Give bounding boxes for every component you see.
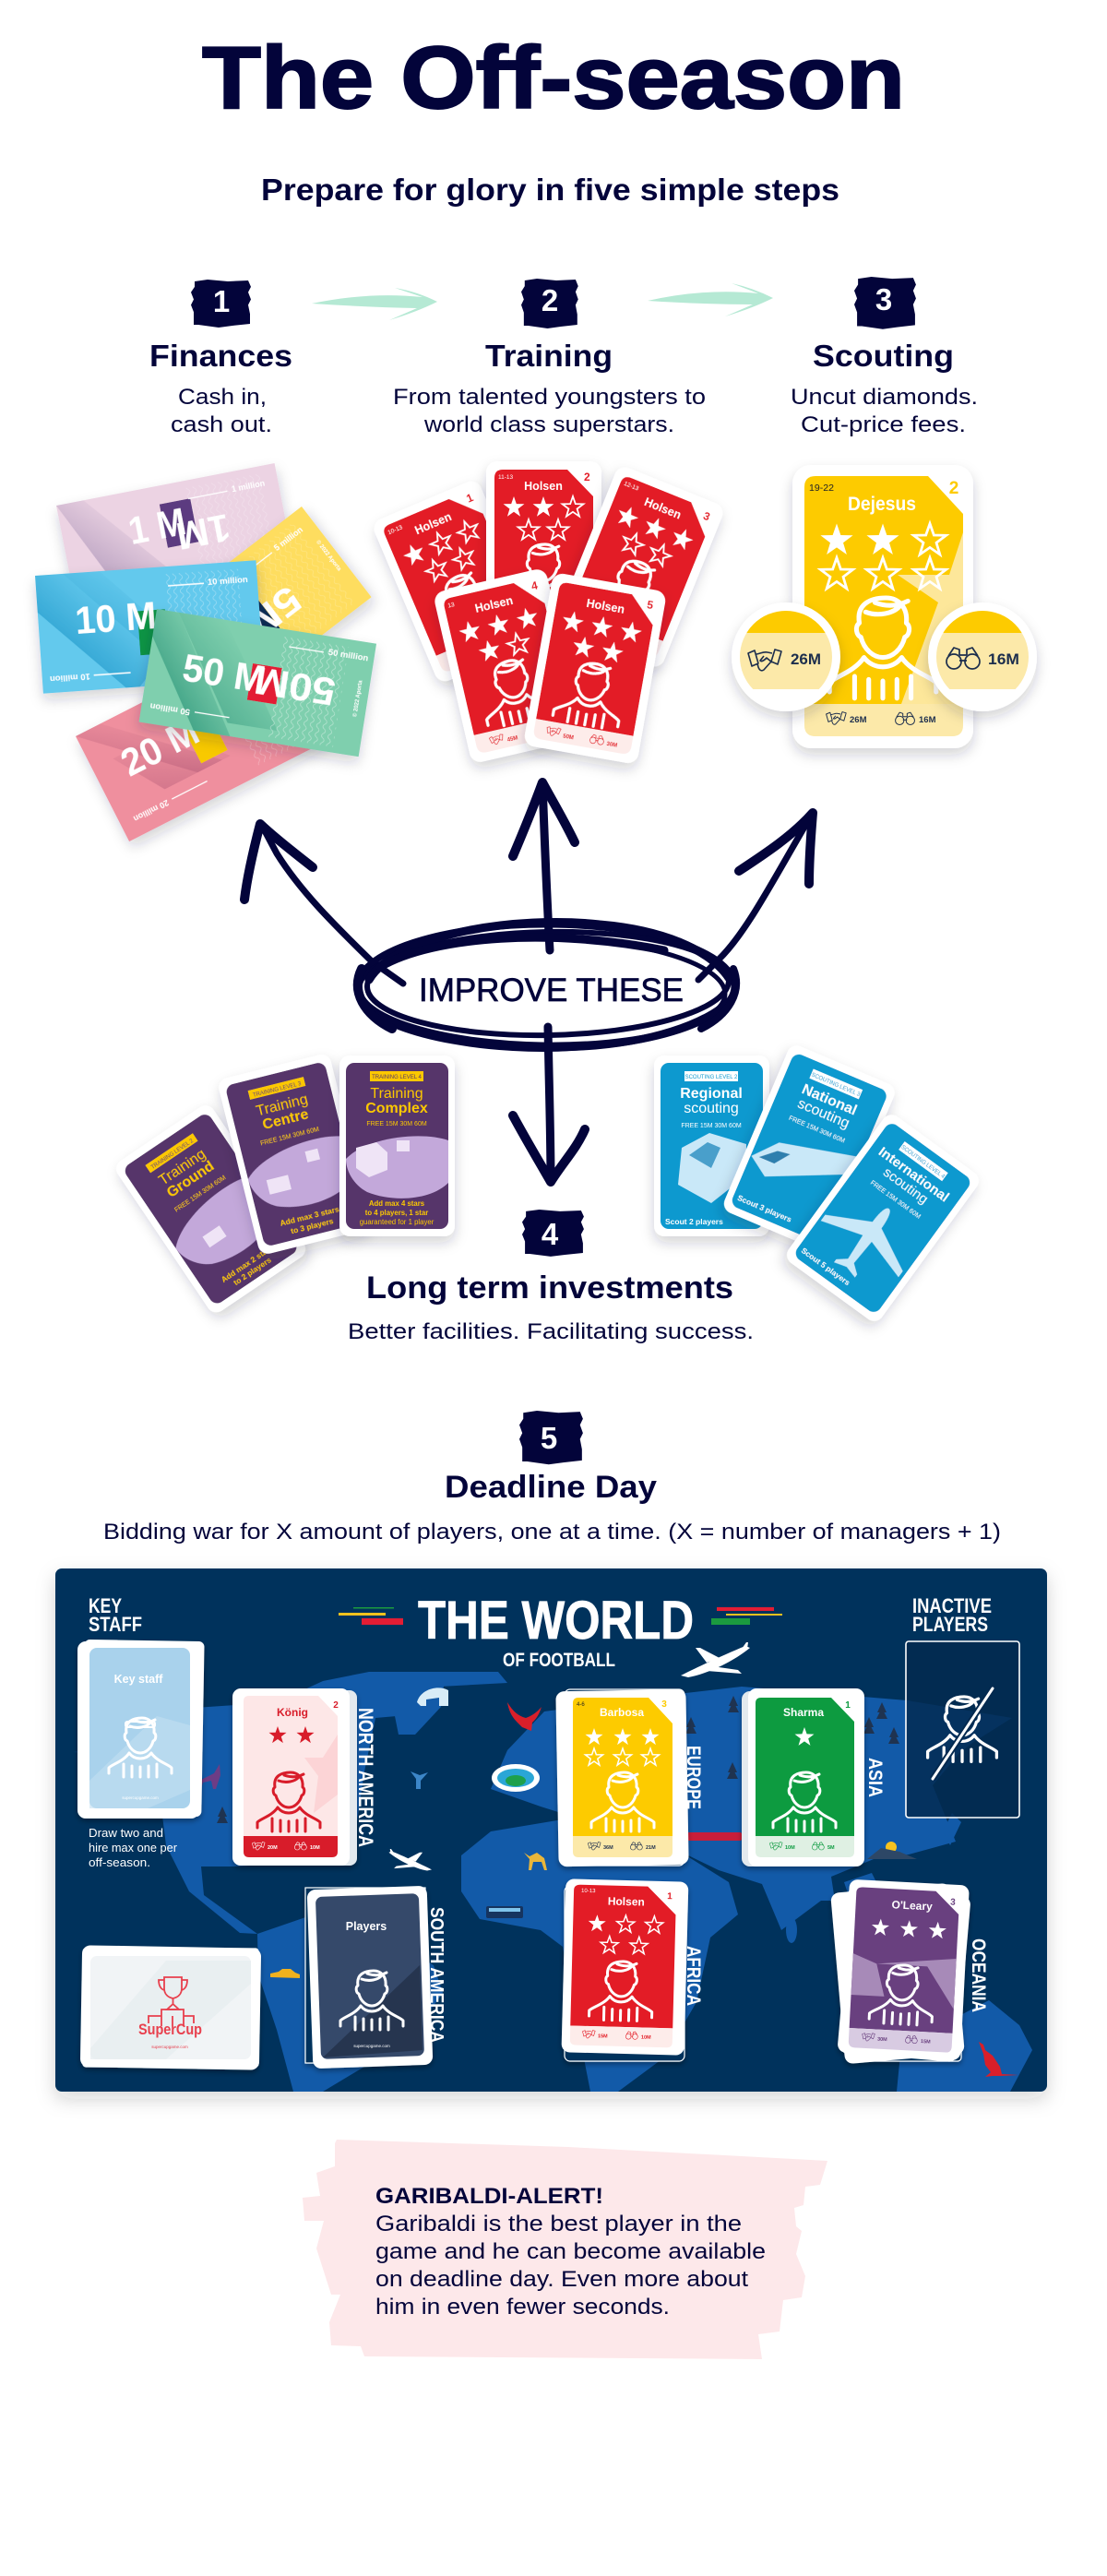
arrow: step 2 to step 3: [648, 283, 773, 316]
card deck: Barbosa: 36M: [603, 1845, 613, 1851]
card deck: key staff: [77, 1640, 205, 1819]
badge 3: [854, 277, 916, 329]
label: europe: EUROPE: [683, 1746, 704, 1809]
icon: taxi: [270, 1969, 300, 1978]
arrow: to long term investments: [513, 1027, 585, 1182]
card deck: Sharma: 1: [845, 1700, 851, 1711]
heading: scouting: Scouting: [813, 339, 954, 373]
callout: scouting price 16M: 16M: [988, 650, 1019, 668]
arrow: to training: [513, 782, 575, 950]
subtitle: Prepare for glory in five simple steps: [261, 173, 839, 207]
card: Training Ground: Add max 2 stars: [220, 1243, 275, 1284]
callout body: game and he can become available: [375, 2239, 766, 2264]
callout: garibaldi alert: [303, 2140, 827, 2359]
hand-drawn arrows and scribbled ellipse: [244, 782, 813, 1182]
brush background: [303, 2140, 827, 2359]
callout: transfer price 26M: 26M: [791, 650, 821, 668]
card: Regional scouting: Regional: [680, 1086, 743, 1102]
note: 20 million: 20 million: [132, 798, 171, 824]
label: improve these: IMPROVE THESE: [419, 972, 684, 1008]
callout heading: GARIBALDI-ALERT!: [375, 2184, 603, 2209]
card deck: players: supercupgame.com: [353, 2044, 390, 2048]
scribbled ellipse: [358, 923, 736, 1048]
card deck: supercup: supercupgame.com: [151, 2045, 188, 2049]
card: International scouting: Scout 5 players: [800, 1246, 852, 1287]
card deck: Holsen: 10-13: [581, 1889, 596, 1894]
card deck: Barbosa: [555, 1689, 689, 1866]
icon: plane top: [681, 1642, 750, 1677]
step 5: deadline day block: [103, 1411, 1001, 1544]
board background: [55, 1568, 1047, 2092]
card: Holsen 2: [486, 461, 601, 637]
label: south america: SOUTH AMERICA: [426, 1907, 446, 2043]
note: 50 million: [139, 609, 376, 757]
red player cards: Holsen 1 to 5: [371, 461, 726, 765]
card deck: Barbosa: 21M: [646, 1845, 656, 1851]
card: Holsen 4: 45M: [506, 735, 518, 744]
card: Regional scouting: SCOUTING LEVEL 2: [685, 1075, 738, 1080]
icon: horse: [199, 1764, 220, 1789]
card: Training Ground: FREE 15M 30M 60M: [173, 1175, 227, 1214]
right color stripes: [711, 1607, 782, 1625]
icon: train: [687, 1832, 742, 1841]
note: 5 million: 5 million: [272, 525, 304, 553]
badge 2: [521, 279, 578, 328]
arrow: to scouting: [698, 813, 813, 980]
card deck: Sharma: 5M: [827, 1845, 835, 1851]
card deck: Holsen: 1: [667, 1891, 673, 1902]
card: National scouting: Scout 3 players: [736, 1193, 793, 1224]
note: 1 million: 1 million: [231, 479, 266, 494]
card: Holsen 1: Holsen: [413, 510, 454, 537]
card: Training Complex: [339, 1055, 455, 1236]
heading: finances: Finances: [149, 339, 292, 373]
card: Regional scouting: scouting: [684, 1101, 739, 1116]
card deck: König: König: [277, 1706, 308, 1719]
arrow: to finances: [244, 824, 403, 984]
badge 1: 1: [213, 284, 230, 318]
card deck: Holsen: [562, 1878, 688, 2061]
callout: transfer price 26M: [732, 602, 840, 711]
card: Dejesus: Dejesus: [848, 494, 916, 515]
card: Holsen 3: 12-13: [623, 481, 640, 493]
heading: long term investments: Long term investments: [366, 1270, 733, 1306]
card deck: O'Leary: [830, 1879, 971, 2064]
card deck: players: [305, 1886, 433, 2069]
step 4: long term investments block: [348, 1210, 754, 1344]
badge 4: [522, 1210, 584, 1257]
card: Training Complex: TRAINING LEVEL 4: [372, 1075, 423, 1080]
instruction: key staff: off-season.: [89, 1856, 150, 1869]
card: National scouting: National: [799, 1081, 859, 1119]
icon: sun and hills: [867, 1842, 917, 1859]
note: 5 million: © 2022 Aporta: [315, 539, 342, 573]
icon: bus: [486, 1906, 523, 1918]
card deck: O'Leary: 15M: [921, 2039, 931, 2045]
note: 10 million: 10 million: [49, 671, 90, 684]
description: scouting: Uncut diamonds.: [791, 385, 978, 410]
card: National scouting: FREE 15M 30M 60M: [788, 1115, 846, 1145]
description: training: world class superstars.: [423, 412, 674, 437]
label: key staff: STAFF: [89, 1613, 142, 1636]
note: 1 million: 1 M: [125, 499, 189, 553]
badge 3: 3: [875, 282, 892, 316]
card: Training Centre: Centre: [261, 1106, 310, 1133]
card: Holsen 1: [371, 478, 545, 685]
card: Regional scouting: FREE 15M 30M 60M: [681, 1123, 742, 1129]
card deck: O'Leary: 3: [950, 1898, 956, 1908]
note: 50 million: 50 M: [180, 646, 268, 701]
card: Holsen 5: Holsen: [586, 597, 625, 616]
step 2: training heading block: [393, 279, 706, 437]
icon: plane lower: [389, 1849, 432, 1871]
card deck: König: [232, 1688, 357, 1866]
callout body: Garibaldi is the best player in the: [375, 2212, 742, 2236]
label: key staff: KEY: [89, 1594, 122, 1617]
note: 50 million: 50 million: [327, 648, 369, 663]
card: Dejesus: 2: [949, 479, 958, 498]
card deck: Barbosa: Barbosa: [600, 1706, 644, 1719]
note: 50 million: 50 million: [149, 700, 191, 717]
card: Regional scouting: [654, 1055, 769, 1236]
card deck: Holsen: 10M: [641, 2034, 651, 2041]
card: Holsen 4: 4: [530, 578, 540, 593]
callout body: on deadline day. Even more about: [375, 2267, 748, 2292]
heading: deadline day: Deadline Day: [445, 1470, 657, 1505]
description: training: From talented youngsters to: [393, 385, 706, 410]
label: inactive players: PLAYERS: [912, 1613, 988, 1636]
card: Training Complex: FREE 15M 30M 60M: [366, 1121, 427, 1127]
card deck: Sharma: [742, 1688, 864, 1866]
note: 50 million: © 2022 Aporta: [351, 679, 364, 718]
note: 10 million: 10 M: [74, 593, 158, 642]
card: National scouting: [720, 1043, 898, 1254]
note: 10 million: [35, 560, 264, 694]
badge 1: [191, 280, 251, 328]
note: 50 million: 50M: [252, 659, 339, 714]
instruction: key staff: hire max one per: [89, 1842, 177, 1854]
board title: [418, 1591, 694, 1671]
card deck: Sharma: Sharma: [783, 1706, 824, 1719]
scouting facility cards: [654, 1043, 982, 1325]
card: International scouting: International: [875, 1144, 952, 1206]
badge 5: 5: [541, 1421, 557, 1455]
card: Holsen 2: Holsen: [524, 480, 563, 493]
card deck: Holsen: Holsen: [608, 1895, 645, 1909]
callout body: him in even fewer seconds.: [375, 2295, 670, 2320]
callout: scouting price 16M: [928, 602, 1037, 711]
scouting card: Dejesus with zoom callouts: [732, 465, 1037, 748]
card: Training Complex: Training: [370, 1086, 423, 1102]
card: Holsen 3: Holsen: [642, 495, 683, 522]
description: finances: cash out.: [171, 412, 272, 437]
description: long term investments: Better facilities. Facilitating success.: [348, 1319, 754, 1344]
card: Holsen 5: [523, 572, 667, 765]
card: Holsen 3: 3: [701, 509, 712, 524]
card deck: Barbosa: 4-6: [577, 1702, 585, 1708]
badge 5: [519, 1411, 583, 1464]
icon: trophy: [149, 1977, 194, 2026]
label: africa: AFRICA: [683, 1946, 704, 2006]
card deck: key staff: supercupgame.com: [122, 1795, 159, 1800]
description: finances: Cash in,: [178, 385, 267, 410]
label: inactive players: INACTIVE: [912, 1594, 992, 1617]
card: Training Complex: Add max 4 stars: [369, 1199, 425, 1208]
card: Holsen 2: 2: [584, 471, 590, 483]
money notes group: [35, 463, 376, 841]
left color stripes: [339, 1607, 403, 1625]
card: Holsen 4: [433, 567, 585, 764]
label: asia: ASIA: [864, 1758, 886, 1797]
arrow: step 1 to step 2: [312, 288, 437, 320]
note: 1 million: [56, 463, 296, 618]
icon: polar bear: [417, 1688, 448, 1706]
card: Holsen 1: 10-13: [387, 524, 404, 536]
card: National scouting: scouting: [795, 1096, 851, 1132]
card: Dejesus: 19-22: [809, 483, 834, 494]
badge 2: 2: [542, 283, 558, 317]
note: 5 million: 5M: [235, 578, 310, 650]
card: Holsen 4: 13: [447, 602, 456, 610]
card: Holsen 1: 1: [464, 491, 475, 506]
card: Training Ground: Ground: [164, 1158, 217, 1201]
card: Holsen 3: [554, 464, 726, 670]
card: Training Complex: Complex: [365, 1101, 428, 1116]
icon: kangaroo: [979, 2042, 1018, 2077]
card deck: Barbosa: 3: [661, 1699, 667, 1710]
title: The Off-season: [202, 29, 905, 127]
card deck: Holsen: 15M: [598, 2033, 608, 2040]
title: the world: THE WORLD: [418, 1591, 694, 1651]
card: Dejesus: 26M: [850, 715, 867, 725]
label: north america: NORTH AMERICA: [354, 1708, 377, 1847]
step 1: finances heading block: [149, 280, 292, 437]
training facility cards: [113, 1053, 455, 1316]
card: Training Centre: FREE 15M 30M 60M: [260, 1127, 320, 1147]
card: Training Centre: [217, 1053, 373, 1256]
card deck: supercup: [80, 1945, 261, 2070]
world map: [73, 1672, 1032, 2092]
card deck: König: 2: [333, 1700, 339, 1711]
card deck: key staff: Key staff: [114, 1673, 163, 1686]
heading: training: Training: [485, 339, 613, 373]
note: 10 million: 10 million: [208, 575, 248, 588]
note: 5 million: [125, 507, 372, 733]
card: Holsen 5: 5: [646, 598, 655, 612]
card: Regional scouting: Scout 2 players: [665, 1217, 723, 1226]
badge 4: 4: [542, 1217, 559, 1251]
card: Holsen 2: 11-13: [498, 474, 514, 481]
card: International scouting: FREE 15M 30M 60M: [869, 1180, 922, 1221]
description: scouting: Cut-price fees.: [801, 412, 966, 437]
slot: inactive players: [906, 1641, 1019, 1818]
icon: trees: [217, 1696, 899, 1823]
card: Training Centre: to 3 players: [290, 1216, 335, 1235]
card: International scouting: scouting: [880, 1164, 931, 1208]
card: Holsen 5: 50M: [563, 734, 574, 741]
note: 20 million: 20 M: [113, 709, 206, 784]
description: deadline day: Bidding war for X amount of players, one at a time. (X = number of managers + 1): [103, 1520, 1001, 1544]
note: 1 million: 1M: [173, 506, 233, 558]
card: International scouting: [783, 1111, 982, 1325]
card: Dejesus: 16M: [919, 715, 936, 725]
card: Training Centre: TRAINING LEVEL 3: [253, 1081, 303, 1099]
card: Training Ground: [113, 1102, 309, 1316]
card: Training Centre: Add max 3 stars: [279, 1204, 340, 1228]
card deck: Sharma: 10M: [785, 1845, 795, 1851]
game board: the world of football: [55, 1568, 1047, 2092]
card: Holsen 4: Holsen: [474, 594, 514, 615]
instruction: key staff: Draw two and: [89, 1827, 163, 1840]
card deck: supercup: SuperCup: [138, 2021, 202, 2038]
card: Training Complex: to 4 players, 1 star: [365, 1209, 428, 1217]
icon: eagle: [507, 1702, 542, 1731]
icon: camel: [524, 1853, 547, 1870]
card deck: König: 20M: [268, 1845, 278, 1851]
icon: stadium: [492, 1764, 540, 1792]
card: Dejesus: [792, 465, 973, 748]
step 3: scouting heading block: [791, 277, 978, 437]
title: of football: OF FOOTBALL: [503, 1650, 615, 1671]
card deck: O'Leary: O'Leary: [891, 1898, 933, 1914]
label: oceania: OCEANIA: [968, 1938, 989, 2012]
card: Training Ground: to 2 players: [232, 1255, 273, 1287]
card: Training Centre: Training: [255, 1091, 309, 1119]
card: International scouting: SCOUTING LEVEL 4: [899, 1145, 946, 1180]
card: Training Complex: guaranteed for 1 player: [360, 1218, 434, 1226]
card: Training Ground: TRAINING LEVEL 2: [150, 1139, 196, 1171]
card: Training Ground: Training: [156, 1146, 208, 1188]
card deck: O'Leary: 30M: [877, 2037, 887, 2043]
card: National scouting: SCOUTING LEVEL 3: [810, 1072, 862, 1098]
icon: whale tail: [411, 1771, 428, 1789]
note: 20 million: [76, 636, 327, 841]
map decorations: [199, 1642, 1018, 2077]
card: Holsen 5: 30M: [606, 742, 617, 749]
card deck: König: 10M: [310, 1845, 320, 1851]
card deck: players: Players: [346, 1920, 387, 1933]
